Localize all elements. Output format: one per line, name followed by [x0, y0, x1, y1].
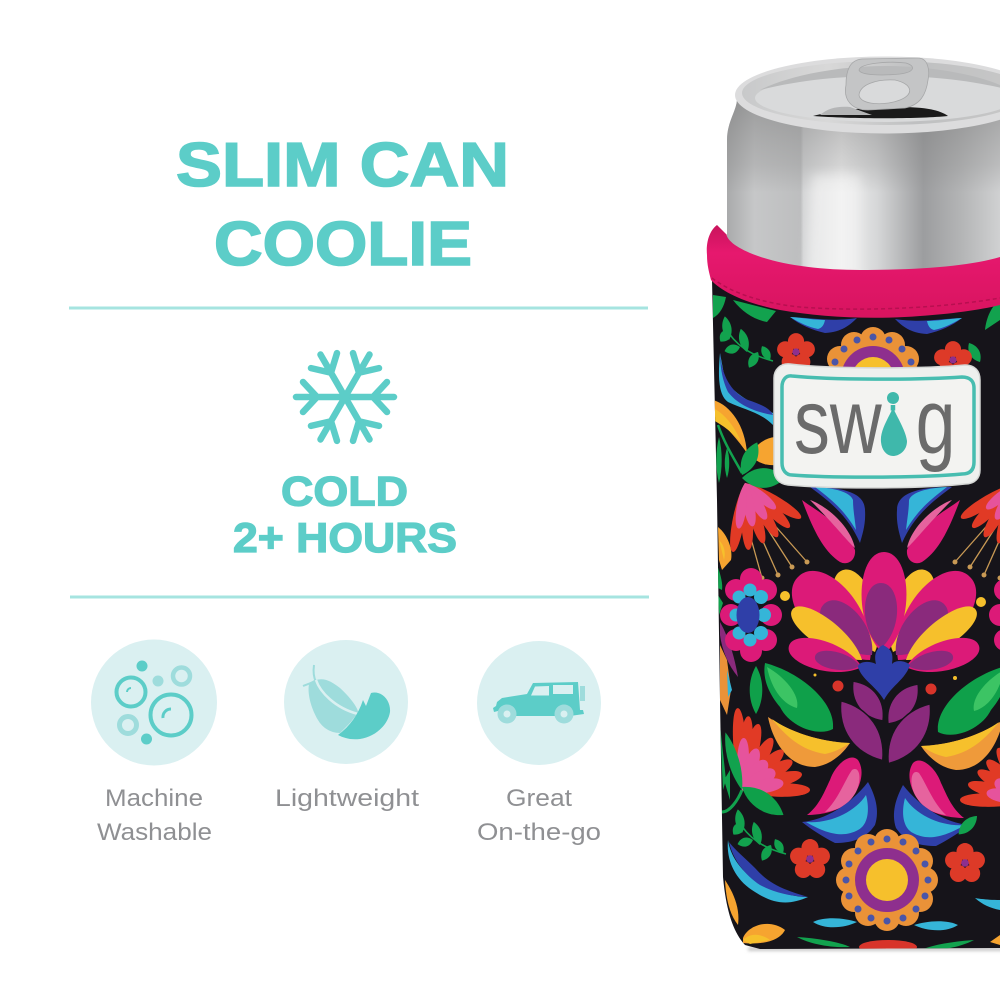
- label: machine washable: Washable: [97, 819, 212, 846]
- product: slim can in coolie: [700, 56, 1000, 955]
- floral: top red flowers: [777, 333, 972, 366]
- icon: jeep: [477, 641, 601, 765]
- label: great on-the-go: [477, 785, 601, 846]
- floral: bottom red flowers: [790, 839, 985, 882]
- icon: feather: [284, 640, 408, 764]
- icon: snowflake: [296, 347, 394, 447]
- floral: bottom edge: [725, 880, 1000, 954]
- heading: cold 2+ hours: COLD: [281, 468, 408, 514]
- floral: bottom wing: [728, 840, 1000, 910]
- floral: central flower: [778, 552, 990, 700]
- label: machine washable: [97, 785, 212, 846]
- floral: upper fans and butterflies: [727, 439, 1000, 580]
- feature: machine washable: [91, 640, 217, 846]
- floral: lower motifs: [750, 663, 1000, 950]
- logo wordmark: i: [887, 393, 899, 467]
- label: machine washable: Machine: [105, 785, 203, 812]
- floral: bottom flower: [836, 829, 938, 931]
- label: great on-the-go: Great: [506, 785, 572, 812]
- title: SLIM CAN: [176, 131, 509, 200]
- badge: swig logo patch: [774, 364, 980, 488]
- label: lightweight: Lightweight: [275, 785, 419, 812]
- floral: mirrored multicolor flower: [989, 580, 1000, 650]
- divider top: [69, 306, 648, 310]
- logo wordmark: sw: [794, 370, 882, 473]
- can rim and lid: [735, 56, 1000, 134]
- floral: top sprig: [713, 295, 1000, 370]
- heading: cold 2+ hours: [233, 468, 457, 561]
- title: [176, 131, 509, 279]
- coolie pink collar: [707, 225, 1000, 318]
- coolie body with folk floral pattern: [700, 275, 1000, 955]
- floral: bottom sprig: [730, 809, 981, 863]
- title: COOLIE: [214, 210, 472, 279]
- logo wordmark: g: [916, 370, 956, 473]
- floral: multicolor flower: [720, 568, 782, 662]
- floor shadow: [748, 947, 1000, 951]
- logo droplet: [881, 392, 907, 456]
- heading: cold 2+ hours: 2+ HOURS: [233, 514, 457, 561]
- divider bottom: [70, 596, 649, 598]
- floral: dots: [780, 591, 986, 694]
- can body: [727, 100, 1000, 285]
- icon: bubbles: [91, 640, 217, 766]
- floral: left edge details: [717, 527, 742, 812]
- feature: lightweight: [275, 640, 419, 812]
- floral: lower fans: [720, 708, 1000, 822]
- floral: top flower: [827, 327, 919, 368]
- floral: top wings: [790, 317, 962, 334]
- floral: upper left wings: [713, 353, 775, 483]
- label: great on-the-go: On-the-go: [477, 819, 601, 846]
- feature: great on-the-go: [477, 641, 601, 846]
